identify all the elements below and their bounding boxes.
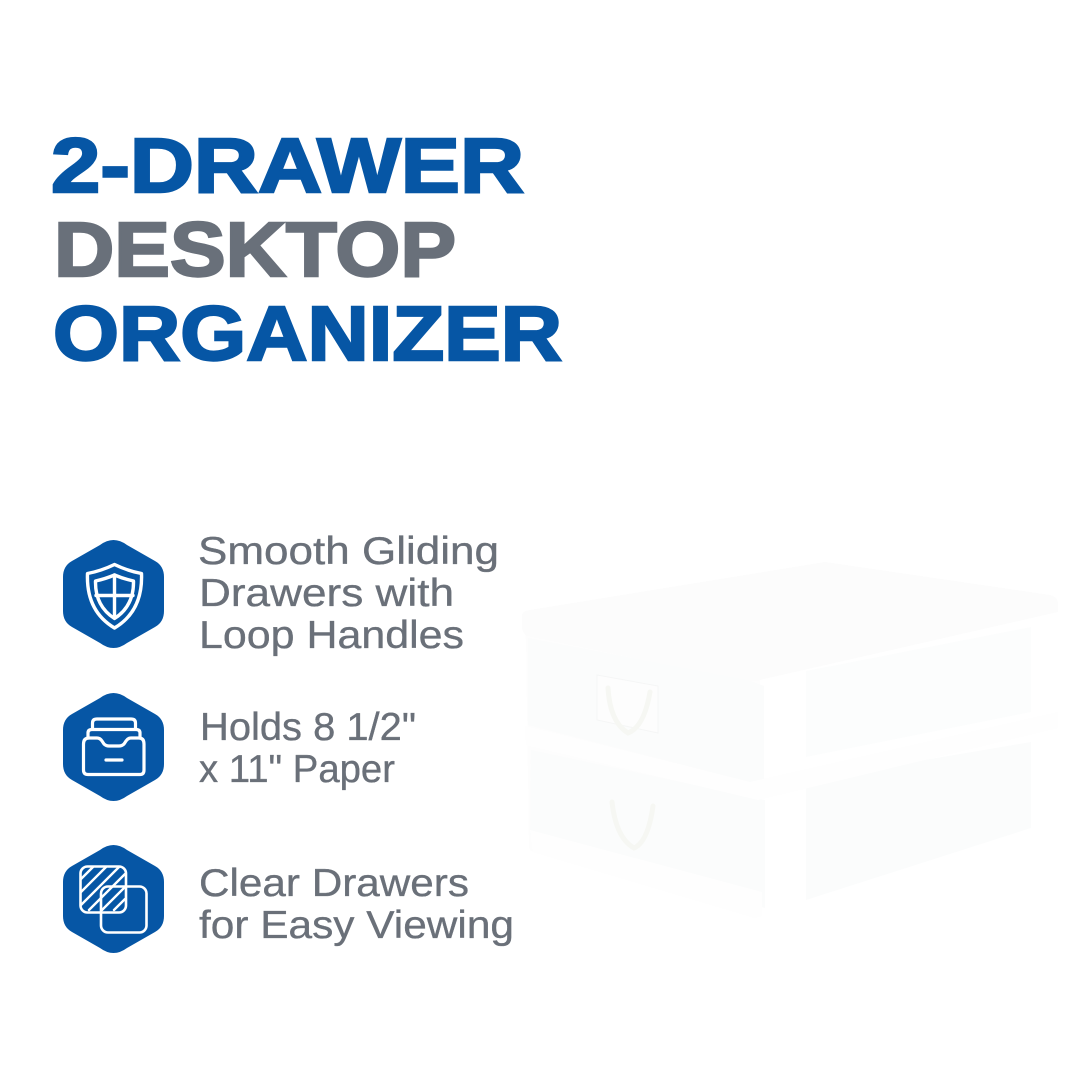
top loop handle: [608, 688, 650, 733]
text: clear drawers: [199, 862, 514, 947]
text: holds paper: x 11" Paper: [199, 748, 395, 791]
text: clear drawers: for Easy Viewing: [199, 904, 514, 947]
feature: smooth gliding drawers: [63, 530, 499, 657]
text: holds paper: [199, 706, 416, 791]
icon: overlapping squares: [63, 845, 164, 953]
icon: paper tray: [63, 693, 164, 801]
side window top: [806, 627, 1031, 757]
drawer divider rail: [525, 712, 1058, 800]
bottom drawer front: [530, 750, 765, 908]
title: [51, 123, 562, 377]
drawer silhouette: [522, 562, 1058, 918]
title: 2-DRAWER: [51, 123, 524, 209]
text: clear drawers: Clear Drawers: [199, 862, 469, 905]
icon: shield: [63, 540, 164, 648]
feature: holds paper: [63, 693, 416, 801]
top drawer front: [528, 638, 764, 785]
side window bottom: [806, 742, 1031, 900]
feature: clear drawers: [63, 845, 514, 953]
text: smooth gliding: Loop Handles: [199, 614, 464, 657]
text: smooth gliding: [198, 530, 499, 657]
top handle plate: [597, 675, 658, 733]
lid top: [522, 562, 1058, 681]
product photo: faded drawer organizer: [522, 562, 1058, 918]
text: smooth gliding: Smooth Gliding: [198, 530, 499, 573]
bottom loop handle: [612, 802, 653, 848]
title: ORGANIZER: [53, 291, 562, 377]
title: DESKTOP: [54, 207, 456, 293]
side frame: [755, 612, 1058, 918]
bottom rail: [530, 830, 762, 918]
text: smooth gliding: Drawers with: [199, 572, 454, 615]
text: holds paper: Holds 8 1/2": [200, 706, 416, 749]
